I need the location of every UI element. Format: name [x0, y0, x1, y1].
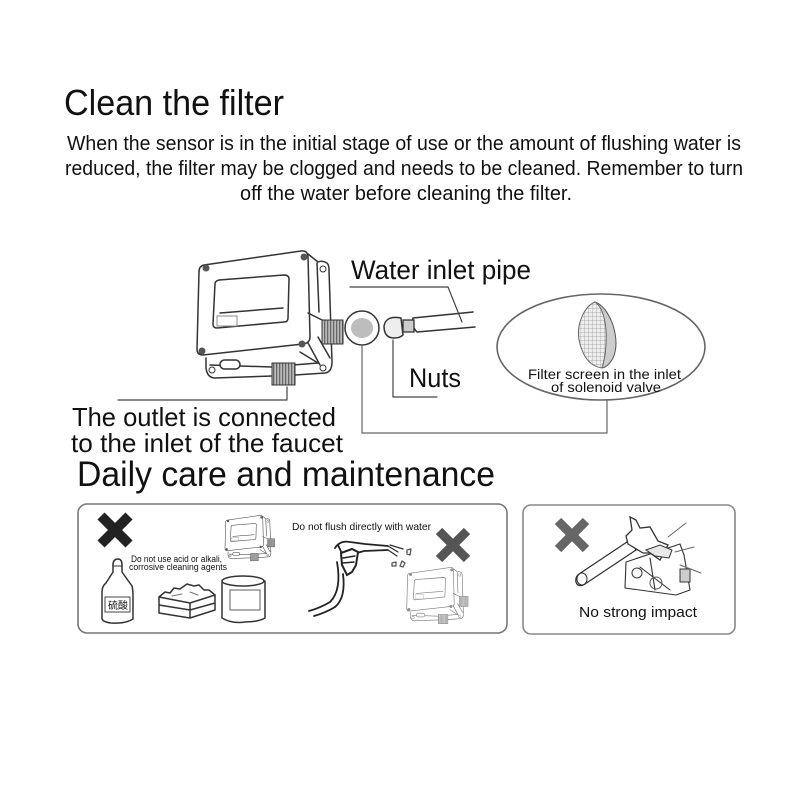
icon: hose spray gun	[309, 542, 411, 616]
icon: small sensor	[225, 515, 275, 561]
icon: acid bottle	[102, 559, 133, 623]
icon: box of powder	[159, 584, 215, 618]
text: no acid or alkali: corrosive cleaning agents	[129, 562, 227, 572]
icon: grey cross	[558, 521, 586, 549]
leader line: nuts	[393, 340, 437, 397]
panel: no strong impact	[523, 505, 735, 634]
label: nuts: Nuts	[409, 363, 461, 393]
label: filter screen: Filter screen in the inlet	[528, 366, 681, 382]
text: no acid or alkali: Do not use acid or alkali,	[131, 554, 222, 564]
text: no acid or alkali	[129, 554, 227, 572]
icon: hammer striking sensor	[576, 517, 701, 595]
panel: chemicals and water warnings	[78, 504, 507, 633]
label: outlet connection	[71, 402, 344, 458]
callout: filter screen ellipse	[497, 294, 705, 400]
text block: filter cleaning instructions	[65, 133, 743, 205]
text block: filter cleaning instructions: reduced, the filter may be clogged and needs to be cleaned. Remember to turn	[65, 158, 743, 180]
icon: can	[222, 576, 265, 622]
leader line: outlet	[118, 387, 287, 400]
text: do not flush: Do not flush directly with water	[292, 521, 431, 533]
label: water inlet pipe: Water inlet pipe	[351, 255, 531, 285]
icon: grey cross	[439, 531, 467, 559]
diagram: sensor box	[197, 251, 343, 385]
title: Clean the filter: Clean the filter	[64, 82, 284, 123]
icon: black cross	[101, 516, 129, 544]
label: filter screen	[528, 366, 681, 395]
label: outlet connection: to the inlet of the faucet	[71, 428, 344, 458]
leader line: filter screen	[362, 345, 607, 433]
heading: Daily care and maintenance: Daily care and maintenance	[77, 455, 495, 494]
icon: faded sensor	[407, 567, 468, 624]
text: no strong impact: No strong impact	[579, 604, 698, 621]
text block: filter cleaning instructions: When the sensor is in the initial stage of use or the amount of flushing water is	[67, 133, 741, 155]
label: filter screen: of solenoid valve	[551, 379, 661, 395]
leader line: inlet pipe	[350, 287, 462, 322]
icon: filter screen	[578, 302, 616, 368]
icon: acid bottle: 硫酸	[108, 599, 128, 612]
diagram: nut and inlet pipe	[384, 312, 475, 338]
diagram: filter washer	[345, 311, 379, 345]
label: outlet connection: The outlet is connected	[72, 402, 336, 432]
text block: filter cleaning instructions: off the water before cleaning the filter.	[240, 183, 572, 205]
